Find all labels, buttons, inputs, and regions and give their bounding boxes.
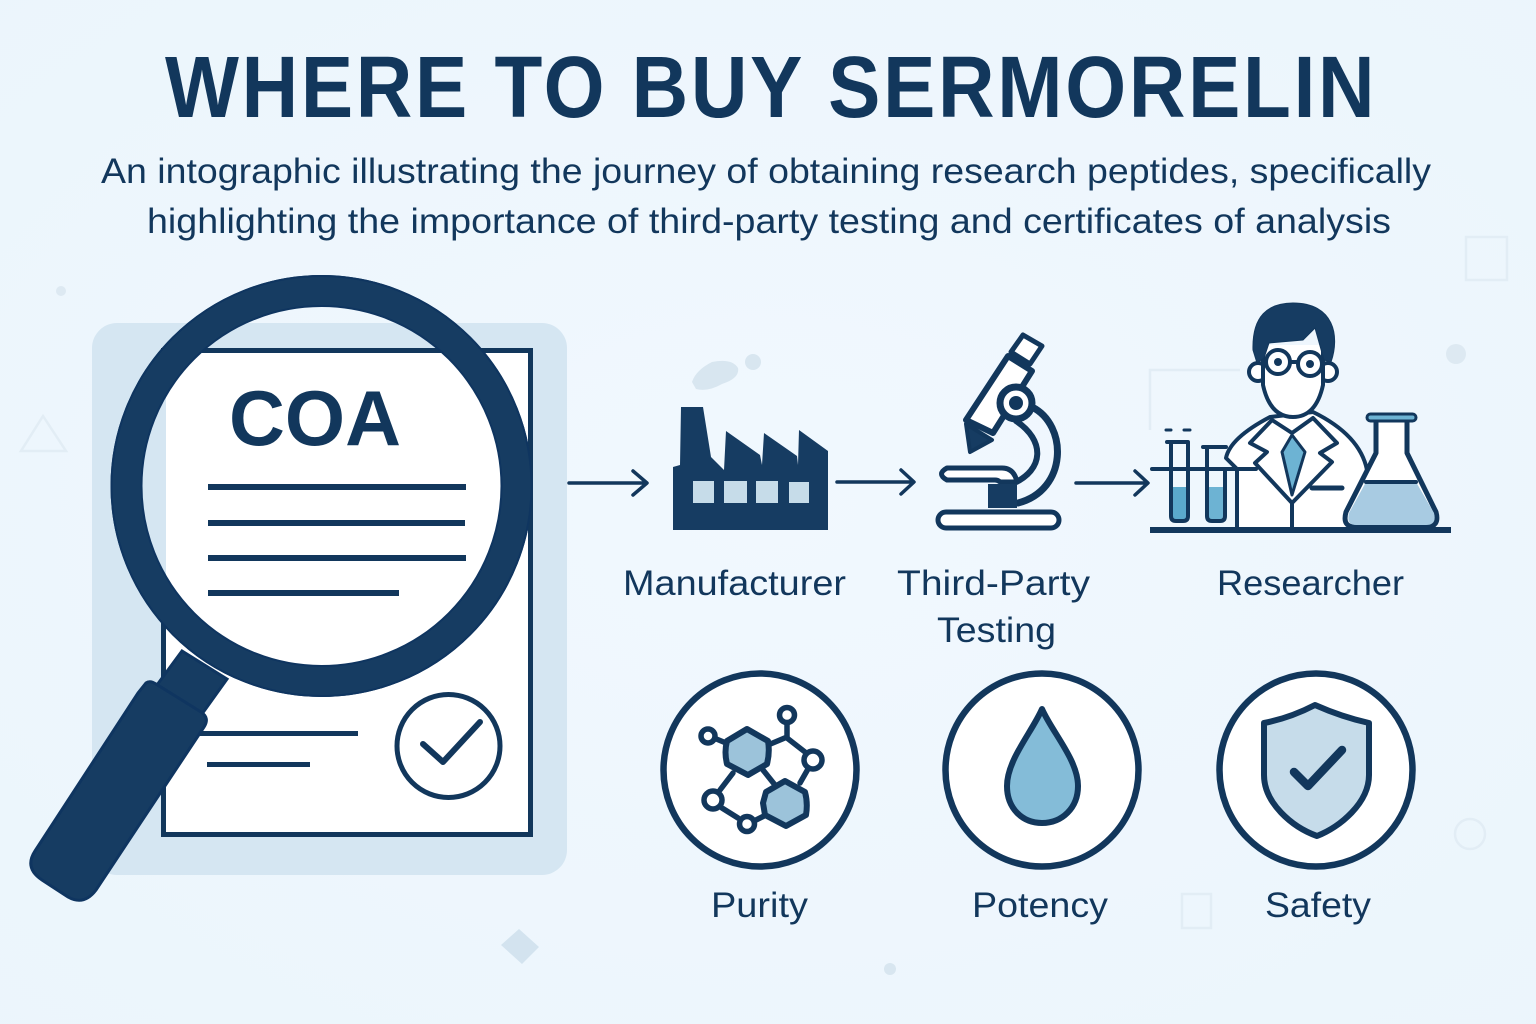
arrow: to manufacturer [569,471,647,495]
lab coat [1226,412,1367,530]
label: Third-Party Testing [897,564,1091,650]
document text lines [200,484,466,767]
subtitle: An intographic illustrating the journey of obtaining research peptides, specifically [101,152,1432,191]
panel: COA document with magnifier [31,276,567,900]
tie [1282,435,1305,495]
icon: potency droplet [946,674,1138,866]
hair [1253,303,1335,363]
subtitle: highlighting the importance of third-party testing and certificates of analysis [147,202,1391,241]
label: Researcher: Researcher [1217,564,1404,603]
label: Potency: Potency [972,886,1109,925]
test tube rack [1152,430,1256,530]
icon: safety shield [1220,674,1412,866]
label: Purity: Purity [711,886,809,925]
COA heading: COA [229,374,401,462]
icon: microscope [938,335,1059,528]
icon: researcher at lab bench [1150,303,1451,530]
head [1249,363,1267,381]
icon: purity molecule [664,674,856,866]
faint background shapes [21,237,1507,975]
glasses [1266,350,1322,376]
document backing panel [92,323,567,875]
icon: factory [673,407,828,530]
title: WHERE TO BUY SERMORELIN [165,38,1375,136]
arrow: to researcher [1076,471,1148,495]
label: Safety: Safety [1265,886,1372,925]
label: Manufacturer: Manufacturer [623,564,846,603]
arrow: to third-party testing [837,470,914,494]
subtitle [101,152,1432,241]
check seal [397,694,500,798]
flask [1345,414,1437,527]
label: Third-Party Testing: Testing [937,611,1056,650]
label: Third-Party Testing: Third-Party [897,564,1091,603]
COA document [150,350,530,834]
magnifying glass [31,276,532,900]
